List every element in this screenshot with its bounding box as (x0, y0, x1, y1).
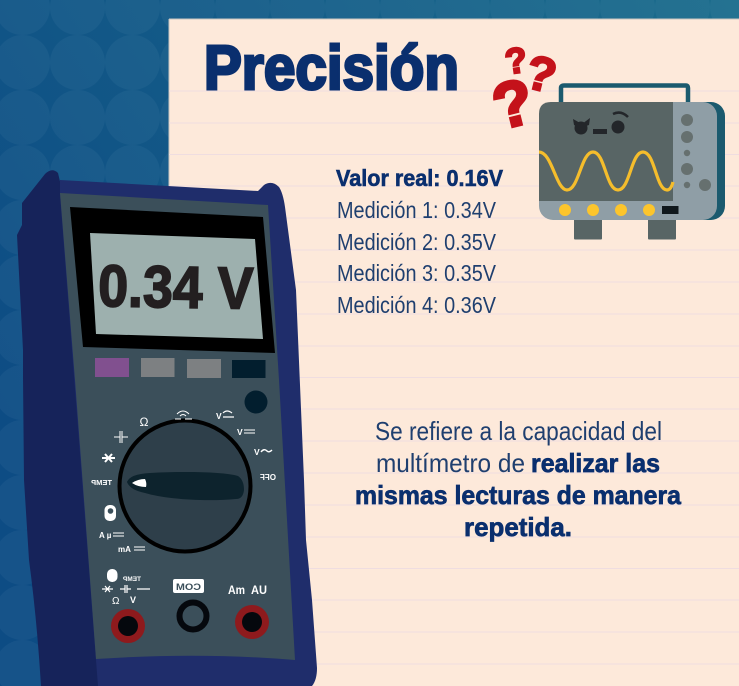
panel: notebook paper (169, 19, 739, 686)
multimeter (17, 170, 317, 686)
icon: question marks: ? (502, 39, 530, 82)
text block: measurements: Medición 3: 0.35V (337, 260, 497, 286)
multimeter front casing (60, 180, 317, 686)
text block: measurements: Medición 1: 0.34V (337, 197, 497, 223)
icon: question marks: ? (520, 46, 562, 104)
dial labels: V (254, 447, 260, 457)
oscilloscope buttons (559, 204, 678, 216)
text block: definition (355, 416, 682, 542)
dial labels: A µ (99, 531, 112, 540)
oscilloscope face (573, 113, 628, 134)
port labels: TEMP (122, 576, 141, 583)
meter buttons (95, 358, 268, 414)
text block: definition: realizar las (531, 448, 660, 478)
port labels: AU (251, 585, 267, 597)
meter screen: 0.34 V (98, 253, 254, 322)
port labels (102, 569, 267, 607)
text block: definition: Se refiere a la capacidad del (375, 416, 662, 446)
dial labels: OFF (260, 473, 276, 482)
port labels: Am (228, 585, 245, 597)
text block: definition: repetida. (464, 512, 572, 542)
multimeter side casing (17, 170, 100, 686)
icon: question marks (485, 39, 562, 143)
dial labels: V (216, 411, 222, 421)
dial labels: V (237, 427, 243, 437)
text block: definition: mismas lecturas de manera (355, 480, 682, 510)
multimeter faceplate (60, 193, 295, 660)
icon: question marks: ? (485, 64, 541, 143)
selector dial (120, 420, 250, 552)
icon: oscilloscope (539, 86, 725, 240)
port labels: COM (176, 582, 201, 593)
dial labels: TEMP (91, 478, 112, 487)
dial labels: Ω (140, 415, 149, 429)
input ports (111, 602, 269, 643)
oscilloscope wave (539, 152, 673, 190)
dial labels: mA (118, 545, 131, 554)
dial labels (91, 411, 276, 554)
oscilloscope knobs (681, 114, 711, 191)
meter screen (70, 207, 275, 353)
text block: definition: multímetro de (376, 448, 525, 478)
port labels: V (130, 595, 136, 605)
text block: measurements (336, 165, 504, 318)
text block: measurements: Valor real: 0.16V (336, 165, 504, 191)
text block: measurements: Medición 2: 0.35V (337, 229, 497, 255)
title: Precisión (204, 34, 459, 103)
port labels: Ω (112, 596, 120, 607)
text block: measurements: Medición 4: 0.36V (337, 292, 497, 318)
